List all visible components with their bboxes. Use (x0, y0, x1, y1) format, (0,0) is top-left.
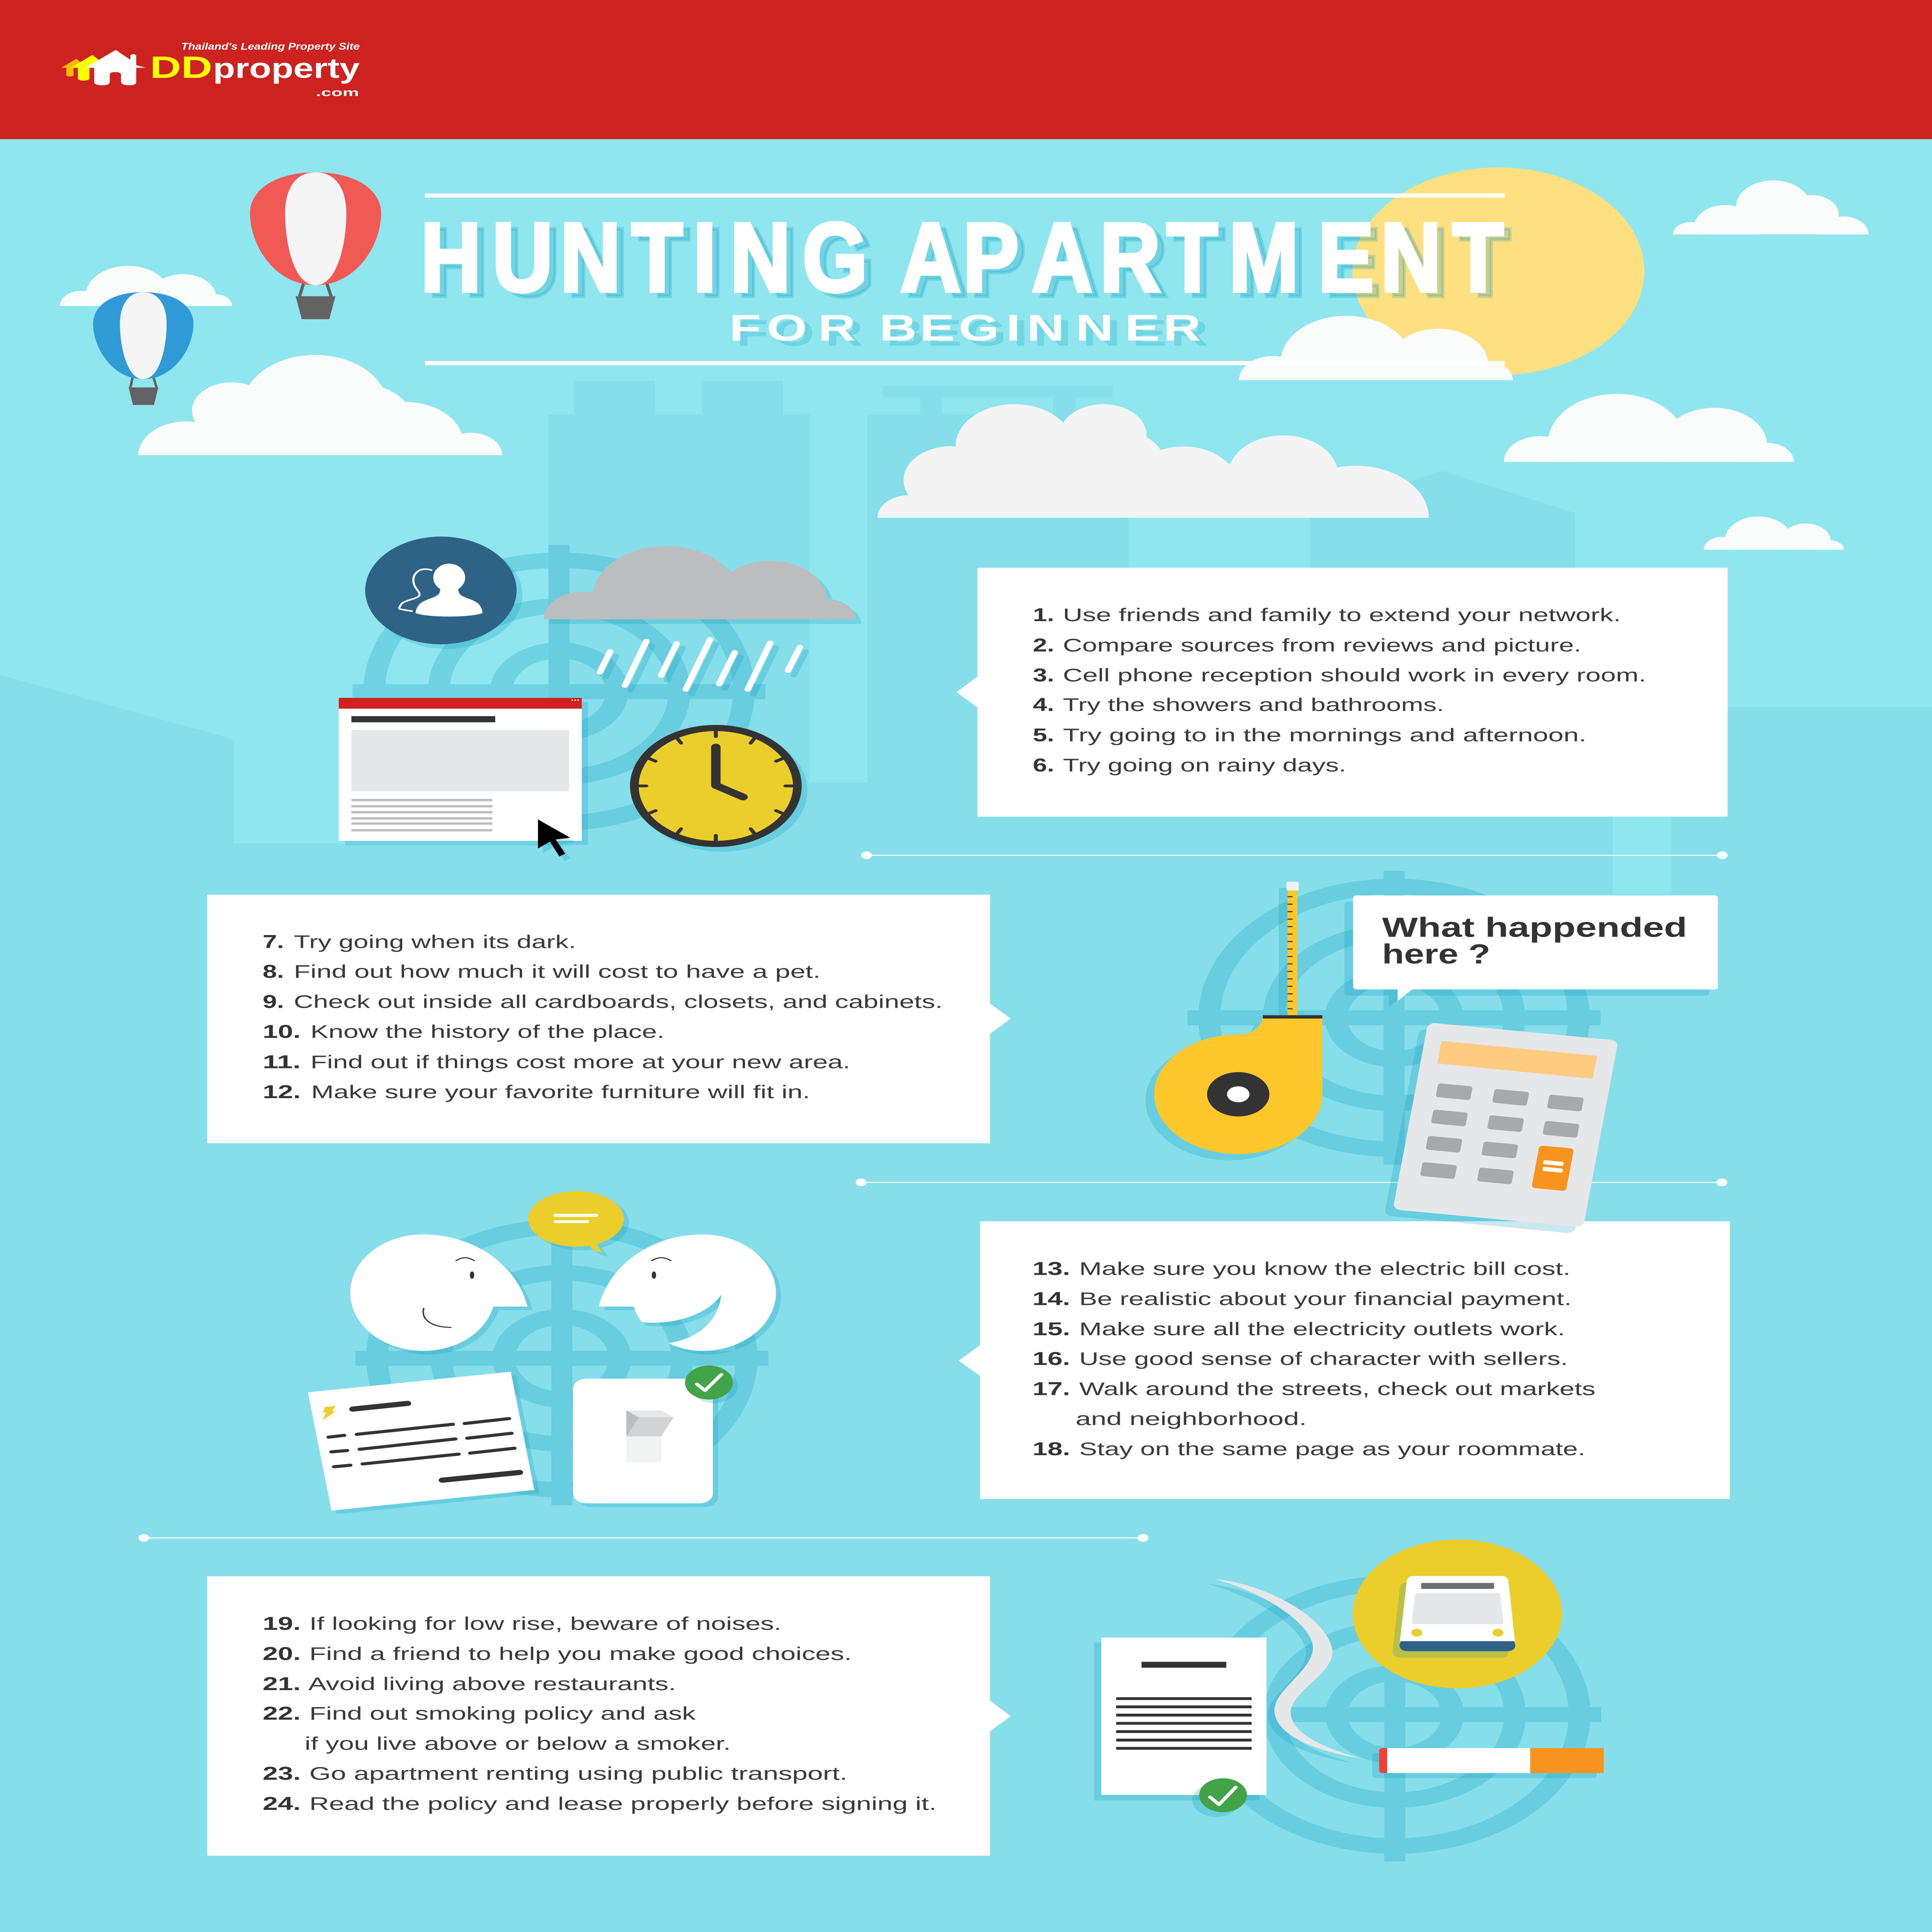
tips text: Be realistic about your financial payment. (1079, 1289, 1571, 1309)
clock ticks (638, 731, 794, 841)
calculator keys (1420, 1083, 1584, 1184)
icon: cigarette (1372, 1748, 1604, 1778)
browser red bar (339, 698, 582, 709)
icon: globe backdrop 4 (1188, 1568, 1601, 1861)
rain cloud shadow (549, 551, 861, 656)
tips text: 8. (263, 961, 284, 982)
train headlight left (1412, 1629, 1422, 1636)
tape shadow (1146, 888, 1314, 1160)
badge disc (685, 1366, 733, 1400)
rain drops (600, 639, 800, 689)
person silhouettes (399, 564, 483, 617)
tape hub centre (1227, 1086, 1250, 1102)
tips text (1032, 1259, 1595, 1459)
tips text: 12. (263, 1082, 301, 1102)
tape ticks (1287, 897, 1293, 1009)
tape hub (1207, 1072, 1269, 1116)
balloon ropes (299, 283, 331, 296)
divider 2 (856, 1179, 1727, 1186)
icon: green check badge (685, 1366, 738, 1403)
switch lever face (626, 1417, 673, 1436)
callout tail (1398, 988, 1414, 1001)
tips text: 3. (1033, 665, 1054, 685)
icon: tape measure (1146, 882, 1322, 1160)
badge shadow (1192, 1783, 1240, 1817)
icon: globe backdrop 2 (1187, 871, 1600, 1165)
document shadow (1094, 1643, 1259, 1800)
tips text: 1. (1033, 605, 1054, 625)
train shadow (1393, 1582, 1509, 1658)
train bumper (1400, 1641, 1515, 1651)
calculator equals key (1531, 1145, 1574, 1191)
tape strip (1287, 890, 1297, 1015)
badge check (1210, 1787, 1236, 1804)
icon: rain cloud (544, 546, 861, 694)
tips text: 4. (1033, 694, 1054, 715)
tips text: 16. (1032, 1349, 1070, 1369)
browser image placeholder (351, 730, 569, 791)
document title (1141, 1662, 1226, 1668)
tips text: 11. (263, 1052, 301, 1072)
bubble shadow (533, 1195, 629, 1257)
tape body (1154, 1019, 1322, 1154)
bill lines (328, 1403, 519, 1480)
badge disc (1199, 1778, 1247, 1812)
cigarette ember (1379, 1748, 1390, 1773)
cigarette shadow (1372, 1753, 1597, 1778)
tips text (263, 932, 943, 1102)
tips text: Make sure all the electricity outlets work. (1079, 1319, 1565, 1339)
bill lightning (323, 1406, 335, 1420)
tips text: 9. (263, 992, 284, 1012)
panel card (207, 1576, 1011, 1856)
tips text: Check out inside all cardboards, closets, and cabinets. (294, 992, 943, 1012)
balloon: blue (93, 292, 194, 405)
clock hands (716, 747, 743, 797)
title rules (425, 194, 1505, 365)
callout: what happended here (1344, 895, 1718, 1007)
tape end tab (1286, 882, 1299, 891)
tips text: 7. (263, 932, 284, 952)
tips text: 5. (1033, 725, 1054, 745)
icon: globe backdrop 3 (355, 1211, 769, 1505)
icon: orange house (61, 59, 87, 77)
balloon white stripe (120, 292, 167, 379)
calculator screen (1437, 1041, 1597, 1079)
balloon envelope (93, 292, 194, 379)
tips text: 10. (263, 1021, 301, 1042)
tips text (1033, 605, 1646, 776)
tips text: Walk around the streets, check out markets (1079, 1379, 1595, 1399)
panel: tips 13 to 18 (959, 1221, 1730, 1499)
tips text: 22. (263, 1703, 301, 1724)
tips text: Use good sense of character with sellers. (1079, 1349, 1568, 1369)
icon: lease document (1094, 1638, 1267, 1800)
tips text (263, 1613, 937, 1814)
switch plate (573, 1379, 713, 1503)
title shadow: HUNTING APARTMENT (428, 208, 1511, 317)
tips text: Try going on rainy days. (1063, 755, 1346, 776)
tips text: Find out how much it will cost to have a pet. (294, 962, 821, 982)
cloud centre large (878, 404, 1429, 570)
tape dark bar (1263, 1015, 1322, 1019)
rain cloud body (544, 546, 855, 652)
right face head (599, 1235, 776, 1351)
smoke body (1215, 1579, 1361, 1759)
icon: smoke swirl (1208, 1579, 1361, 1763)
cloud top right (1673, 180, 1869, 235)
train destination sign (1421, 1583, 1494, 1589)
browser shadow (345, 702, 588, 845)
tips text: and neighborhood. (1076, 1409, 1307, 1429)
tips text: Make sure your favorite furniture will fit in. (311, 1082, 810, 1102)
tips text: if you live above or below a smoker. (304, 1734, 731, 1754)
train headlight right (1493, 1629, 1503, 1636)
person circle shadow (371, 541, 522, 649)
clock face (639, 731, 793, 841)
bubble body (528, 1191, 624, 1247)
icon: green check badge on document (1192, 1778, 1247, 1817)
divider 3 (138, 1534, 1148, 1542)
icon: yellow house (71, 55, 109, 81)
badge check (697, 1374, 721, 1391)
balloon basket (129, 388, 158, 405)
panel: tips 19 to 24 (207, 1576, 1011, 1856)
switch shadow (578, 1382, 718, 1507)
tips text: Find out smoking policy and ask (310, 1704, 696, 1724)
cigarette paper (1387, 1748, 1530, 1773)
header band (0, 0, 1932, 139)
callout text: What happended (1382, 912, 1687, 943)
browser text lines (351, 800, 492, 830)
switch base (626, 1436, 661, 1462)
icon: light switch (573, 1379, 718, 1507)
bill shadow (313, 1375, 539, 1514)
panel: tips 1 to 6 (956, 568, 1728, 816)
left face head (350, 1235, 527, 1351)
panel card (959, 1221, 1730, 1499)
tips text: Compare sources from reviews and picture. (1063, 635, 1581, 656)
panel: tips 7 to 12 (207, 895, 1011, 1143)
tips text: 21. (263, 1673, 301, 1694)
left face shadow (355, 1238, 532, 1354)
icon: left face (350, 1235, 532, 1354)
cloud left large (138, 355, 502, 455)
icon: white house (85, 50, 146, 85)
cloud small right (1704, 516, 1844, 550)
tips text: 6. (1033, 755, 1054, 776)
tips text: 23. (263, 1763, 301, 1784)
divider 1 (861, 851, 1728, 859)
yellow circle (1353, 1539, 1562, 1688)
callout: what happended here: here ? (1382, 939, 1490, 969)
calculator body (1393, 1022, 1618, 1228)
train body (1400, 1576, 1515, 1651)
callout box (1353, 895, 1718, 990)
subtitle (729, 307, 1208, 354)
title main: HUNTING APARTMENT (421, 203, 1503, 312)
tips text: Find out if things cost more at your new area. (310, 1052, 850, 1072)
panel card (956, 568, 1728, 816)
cloud behind blue balloon (60, 266, 232, 306)
person circle disc (365, 537, 517, 644)
callout shadow (1344, 901, 1709, 1007)
tips text: If looking for low rise, beware of noises. (310, 1614, 781, 1634)
panel card (207, 895, 1011, 1143)
clock rim (630, 725, 802, 847)
tips text: 2. (1033, 635, 1054, 656)
balloon: red (250, 172, 381, 319)
browser page (339, 698, 582, 841)
cloud right middle (1504, 394, 1794, 462)
tips text: Know the history of the place. (310, 1022, 664, 1042)
balloon ropes (131, 378, 156, 388)
switch lever side (626, 1411, 639, 1436)
subtitle shadow: FOR BEGINNER (736, 312, 1208, 354)
tips text: Avoid living above restaurants. (308, 1674, 676, 1694)
switch lever top (626, 1411, 673, 1417)
clock shadow (636, 730, 808, 852)
rain shadow (606, 644, 806, 694)
icon: electric bill (308, 1372, 539, 1514)
tips text: Go apartment renting using public transport. (310, 1764, 847, 1784)
balloon white stripe (285, 172, 346, 285)
tips text: 15. (1032, 1319, 1070, 1339)
document page (1101, 1638, 1267, 1795)
browser dots (571, 699, 579, 701)
train windscreen (1412, 1593, 1503, 1624)
tips text: Stay on the same page as your roommate. (1079, 1439, 1585, 1459)
tips text: 14. (1032, 1289, 1070, 1309)
logo: DDproperty (61, 41, 360, 99)
tips text: 19. (263, 1613, 301, 1634)
tips text: Try going when its dark. (294, 932, 576, 952)
tips text: Try the showers and bathrooms. (1063, 695, 1444, 715)
icon: mouse cursor (538, 820, 575, 861)
right face shadow (604, 1238, 781, 1354)
icon: clock (630, 725, 808, 852)
icon: calculator (1384, 1022, 1618, 1234)
bill paper (308, 1372, 534, 1510)
tips text: 13. (1032, 1259, 1070, 1279)
subtitle main: FOR BEGINNER (729, 307, 1201, 349)
tips text: Try going to in the mornings and afternoon. (1063, 725, 1587, 745)
badge shadow (690, 1369, 738, 1403)
smoke shadow (1208, 1584, 1354, 1763)
tips text: Cell phone reception should work in every room. (1063, 665, 1646, 685)
tips text: 18. (1032, 1439, 1070, 1459)
icon: train on yellow circle (1353, 1539, 1562, 1688)
icon: browser window (339, 698, 588, 845)
bubble lines (554, 1214, 598, 1217)
logo text DD: DD (150, 50, 212, 85)
cursor shadow (543, 824, 575, 861)
cloud on sun (1239, 316, 1513, 410)
tips text: 17. (1032, 1379, 1070, 1399)
tips text: Make sure you know the electric bill cost. (1079, 1259, 1570, 1279)
icon: person circle (365, 537, 522, 649)
cursor arrow (538, 820, 570, 857)
balloon envelope (250, 172, 381, 285)
icon: right face (599, 1235, 781, 1354)
sun (1352, 167, 1645, 375)
document lines (1116, 1699, 1252, 1748)
tips text: Find a friend to help you make good choices. (310, 1644, 852, 1664)
left face features (423, 1258, 474, 1327)
logo tagline: Thailand's Leading Property Site (181, 41, 360, 52)
cigarette filter (1530, 1748, 1604, 1773)
tips text: 24. (263, 1793, 301, 1814)
icon: speech bubble (528, 1191, 629, 1257)
tips text: Read the policy and lease properly before signing it. (310, 1794, 937, 1814)
tips text: Use friends and family to extend your network. (1063, 605, 1621, 625)
title (421, 203, 1511, 317)
logo text property: property (213, 53, 360, 84)
tips text: 20. (263, 1643, 301, 1664)
icon: globe backdrop 1 (352, 545, 765, 838)
calculator shadow (1384, 1029, 1610, 1234)
browser heading bar (351, 716, 495, 722)
right face features (651, 1258, 671, 1278)
balloon basket (296, 296, 335, 319)
logo text .com: .com (316, 87, 359, 99)
